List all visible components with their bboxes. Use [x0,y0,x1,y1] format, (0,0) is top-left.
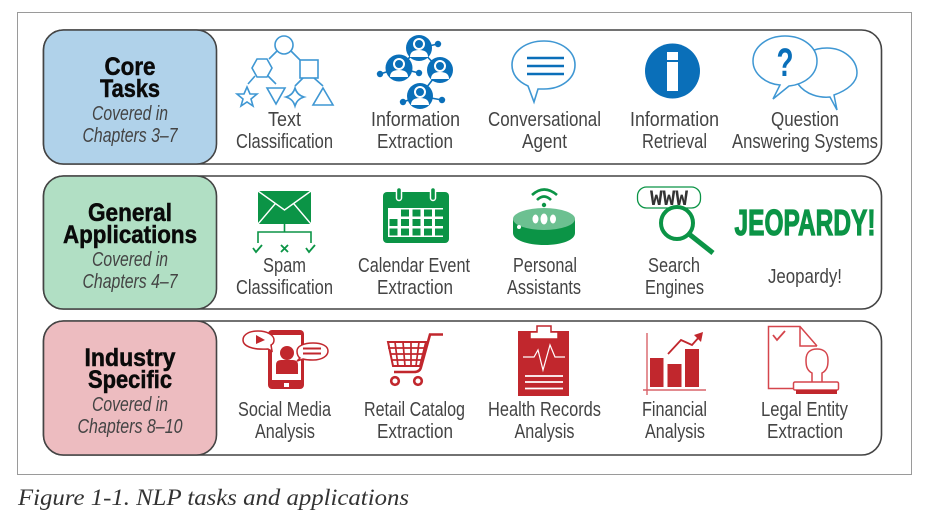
panel: general applications row [44,176,882,309]
heading: general applications: Chapters 4–7 [82,271,178,293]
label: personal assistants: Assistants [507,277,581,299]
icon: text classification tree [237,36,333,106]
icon: search engine magnifier: WWW [650,187,689,212]
panel: core tasks row [44,30,882,164]
label: personal assistants [507,255,581,299]
label: social media analysis: Analysis [255,421,315,443]
label: retail catalog extraction [364,399,465,443]
heading: general applications: Covered in [92,249,168,271]
label: social media analysis: Social Media [238,399,332,421]
label: financial analysis [642,399,707,443]
label: information extraction [371,109,460,153]
label: retail catalog extraction: Extraction [377,421,453,443]
label: text classification [236,109,333,153]
label: spam classification [236,255,333,299]
label: text classification: Classification [236,131,333,153]
heading: industry specific [44,321,216,455]
label: retail catalog extraction: Retail Catalog [364,399,465,421]
label: legal entity extraction: Legal Entity [761,399,848,421]
label: legal entity extraction: Extraction [767,421,843,443]
heading: industry specific: Specific [88,366,172,394]
label: calendar event extraction: Extraction [377,277,453,299]
label: legal entity extraction [761,399,848,443]
heading: general applications: General [88,199,172,227]
label: conversational agent: Agent [522,131,567,153]
icon: personal assistant smart speaker [513,190,575,245]
heading: core tasks: Covered in [92,103,168,125]
label: jeopardy: Jeopardy! [768,266,842,288]
label: question answering systems [732,109,878,153]
heading: core tasks [44,30,216,164]
label: personal assistants: Personal [513,255,577,277]
label: health records analysis: Health Records [488,399,601,421]
icon: social media phone [243,330,328,389]
icon: jeopardy logo: JEOPARDY! [734,202,876,243]
caption: Figure 1-1. NLP tasks and applications [17,485,409,510]
icon: spam classification envelope [253,191,315,252]
label: conversational agent: Conversational [488,109,601,131]
icon: question answering speech bubbles [753,36,857,110]
icon: conversational agent speech bubble [512,41,575,102]
heading: core tasks: Core [104,53,156,81]
label: information retrieval: Information [630,109,719,131]
label: question answering systems: Question [771,109,839,131]
icon: shopping cart [388,334,443,385]
icon: calendar [383,190,449,243]
icon: health records clipboard [518,326,569,396]
label: financial analysis: Analysis [645,421,705,443]
label: search engines [645,255,704,299]
icon: information extraction network [377,35,453,109]
label: health records analysis: Analysis [514,421,574,443]
label: search engines: Engines [645,277,704,299]
panel: industry specific row [44,321,882,455]
icon: financial bar chart [643,332,706,395]
icon: question answering speech bubbles: ? [776,41,794,85]
label: health records analysis [488,399,601,443]
icon: information retrieval [645,44,700,98]
label: question answering systems: Answering Systems [732,131,878,153]
heading: industry specific: Covered in [92,394,168,416]
icon: legal document and stamp [768,326,838,394]
heading: industry specific: Industry [84,344,176,372]
label: spam classification: Classification [236,277,333,299]
icon: search engine magnifier [638,187,713,253]
heading: core tasks: Chapters 3–7 [82,125,178,147]
label: information extraction: Information [371,109,460,131]
heading: general applications [44,176,216,309]
heading: industry specific: Chapters 8–10 [78,416,182,438]
label: financial analysis: Financial [642,399,707,421]
label: spam classification: Spam [263,255,306,277]
label: calendar event extraction [358,255,470,299]
label: information retrieval: Retrieval [642,131,707,153]
label: information retrieval [630,109,719,153]
label: information extraction: Extraction [377,131,453,153]
label: calendar event extraction: Calendar Event [358,255,470,277]
heading: core tasks: Tasks [100,75,160,103]
heading: general applications: Applications [63,221,197,249]
label: search engines: Search [648,255,700,277]
label: social media analysis [238,399,332,443]
label: text classification: Text [268,109,301,131]
label: conversational agent [488,109,601,153]
